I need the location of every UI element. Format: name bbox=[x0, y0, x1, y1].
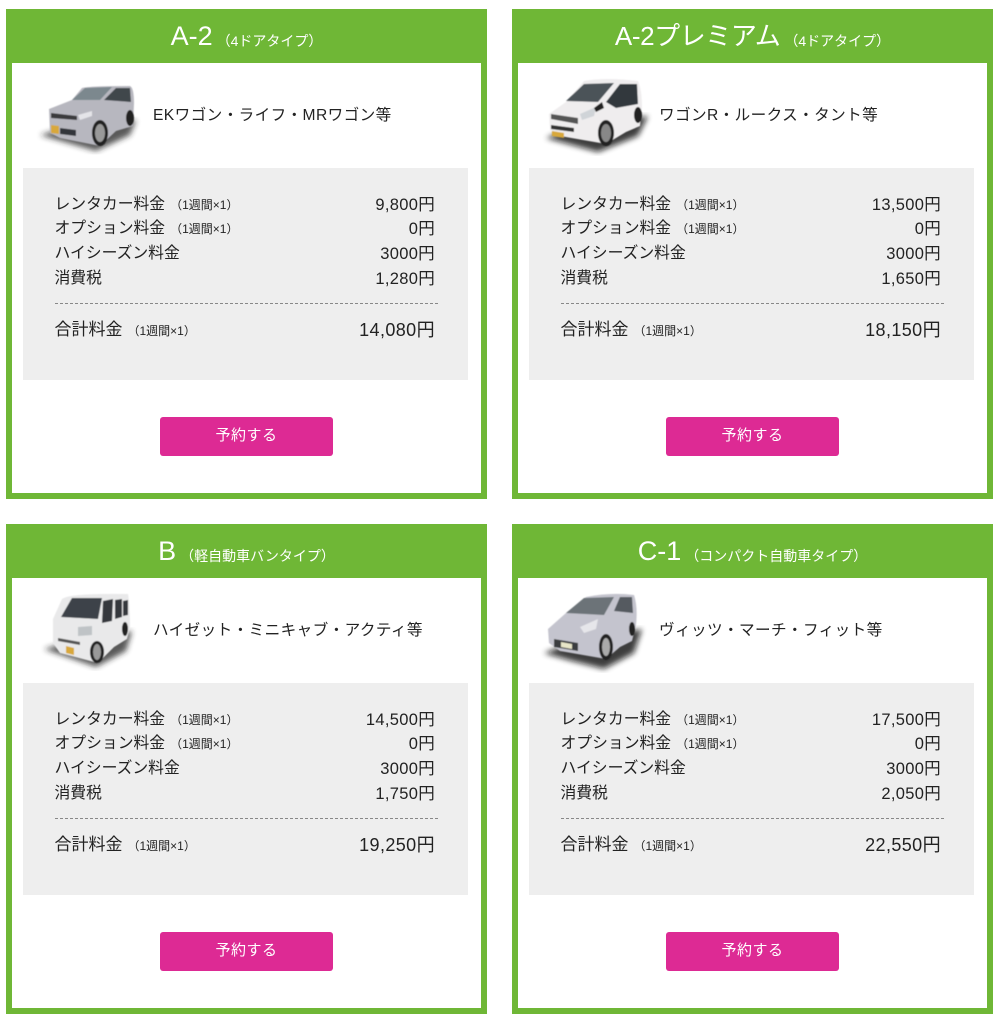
panel: B bbox=[6, 524, 487, 1014]
panel: A-2 bbox=[6, 9, 487, 499]
row: high season fee bbox=[54, 759, 435, 778]
row: high season fee: 3000円 bbox=[886, 245, 941, 263]
row: total bbox=[54, 320, 435, 340]
row: option fee bbox=[560, 219, 941, 238]
button: reserve bbox=[160, 417, 333, 456]
button: reserve: 予約する bbox=[721, 942, 784, 959]
icon: white van bbox=[42, 594, 136, 671]
row: option fee: 0円 bbox=[915, 735, 941, 753]
panel: price table bbox=[23, 168, 468, 380]
row: option fee bbox=[54, 219, 435, 238]
row: tax bbox=[560, 269, 941, 288]
row: tax: 1,280円 bbox=[375, 270, 435, 288]
row: tax: 消費税 bbox=[54, 270, 102, 287]
row: high season fee bbox=[54, 244, 435, 263]
row: tax: 消費税 bbox=[54, 785, 102, 802]
row: option fee: オプション料金 （1週間×1） bbox=[54, 220, 238, 237]
row: rental fee: レンタカー料金 （1週間×1） bbox=[560, 196, 744, 213]
text: car models: ハイゼット・ミニキャブ・アクティ等 bbox=[153, 622, 423, 639]
button: reserve bbox=[160, 932, 333, 971]
row: high season fee: ハイシーズン料金 bbox=[54, 245, 180, 262]
row: total: 22,550円 bbox=[865, 835, 941, 855]
row: tax bbox=[54, 269, 435, 288]
button: reserve bbox=[666, 417, 839, 456]
row: option fee: オプション料金 （1週間×1） bbox=[560, 735, 744, 752]
heading: A-2 Premium bbox=[512, 9, 993, 63]
row: total bbox=[54, 835, 435, 855]
row: high season fee: 3000円 bbox=[886, 760, 941, 778]
heading: C-1: C-1 （コンパクト自動車タイプ） bbox=[638, 536, 867, 566]
panel: price table bbox=[23, 683, 468, 895]
row: tax: 2,050円 bbox=[881, 785, 941, 803]
row: high season fee: ハイシーズン料金 bbox=[560, 245, 686, 262]
row: total: 合計料金 （1週間×1） bbox=[54, 835, 196, 854]
row: rental fee: レンタカー料金 （1週間×1） bbox=[54, 196, 238, 213]
button: reserve: 予約する bbox=[215, 942, 278, 959]
row: rental fee bbox=[54, 195, 435, 214]
heading: A-2: A-2 （4ドアタイプ） bbox=[171, 21, 322, 51]
row: option fee: 0円 bbox=[409, 220, 435, 238]
row: rental fee: 17,500円 bbox=[872, 711, 941, 729]
heading: B: B （軽自動車バンタイプ） bbox=[158, 536, 335, 566]
icon: silver wagon car bbox=[38, 86, 139, 154]
row: tax: 消費税 bbox=[560, 785, 608, 802]
row: rental fee: レンタカー料金 （1週間×1） bbox=[560, 711, 744, 728]
heading: A-2 bbox=[6, 9, 487, 63]
row: total: 合計料金 （1週間×1） bbox=[54, 320, 196, 339]
row: total: 合計料金 （1週間×1） bbox=[560, 320, 702, 339]
button: reserve: 予約する bbox=[215, 427, 278, 444]
row: option fee: オプション料金 （1週間×1） bbox=[54, 735, 238, 752]
row: rental fee bbox=[560, 195, 941, 214]
row: rental fee: レンタカー料金 （1週間×1） bbox=[54, 711, 238, 728]
panel: price table bbox=[529, 683, 974, 895]
row: total: 合計料金 （1週間×1） bbox=[560, 835, 702, 854]
row: rental fee: 13,500円 bbox=[872, 196, 941, 214]
icon: silver compact car bbox=[542, 594, 646, 673]
row: total: 14,080円 bbox=[359, 320, 435, 340]
row: rental fee: 9,800円 bbox=[375, 196, 435, 214]
row: total: 19,250円 bbox=[359, 835, 435, 855]
row: high season fee: 3000円 bbox=[380, 245, 435, 263]
row: rental fee bbox=[54, 710, 435, 729]
row: total bbox=[560, 835, 941, 855]
row: tax: 1,750円 bbox=[375, 785, 435, 803]
row: high season fee bbox=[560, 244, 941, 263]
row: tax: 消費税 bbox=[560, 270, 608, 287]
row: high season fee: ハイシーズン料金 bbox=[560, 760, 686, 777]
panel: A-2 Premium bbox=[512, 9, 993, 499]
text: car models: EKワゴン・ライフ・MRワゴン等 bbox=[153, 107, 392, 124]
row: high season fee bbox=[560, 759, 941, 778]
panel: C-1 bbox=[512, 524, 993, 1014]
heading: C-1 bbox=[512, 524, 993, 578]
row: tax bbox=[560, 784, 941, 803]
button: reserve bbox=[666, 932, 839, 971]
row: total: 18,150円 bbox=[865, 320, 941, 340]
heading: A-2 Premium: A-2プレミアム （4ドアタイプ） bbox=[615, 21, 890, 51]
row: rental fee bbox=[560, 710, 941, 729]
button: reserve: 予約する bbox=[721, 427, 784, 444]
heading: B bbox=[6, 524, 487, 578]
text: car models: ワゴンR・ルークス・タント等 bbox=[659, 107, 878, 124]
row: option fee: 0円 bbox=[409, 735, 435, 753]
row: high season fee: ハイシーズン料金 bbox=[54, 760, 180, 777]
panel: price table bbox=[529, 168, 974, 380]
row: option fee: 0円 bbox=[915, 220, 941, 238]
text: car models: ヴィッツ・マーチ・フィット等 bbox=[659, 622, 883, 639]
row: tax: 1,650円 bbox=[881, 270, 941, 288]
row: option fee: オプション料金 （1週間×1） bbox=[560, 220, 744, 237]
row: rental fee: 14,500円 bbox=[366, 711, 435, 729]
icon: white kei car bbox=[544, 79, 651, 156]
row: tax bbox=[54, 784, 435, 803]
row: high season fee: 3000円 bbox=[380, 760, 435, 778]
row: option fee bbox=[54, 734, 435, 753]
row: total bbox=[560, 320, 941, 340]
row: option fee bbox=[560, 734, 941, 753]
